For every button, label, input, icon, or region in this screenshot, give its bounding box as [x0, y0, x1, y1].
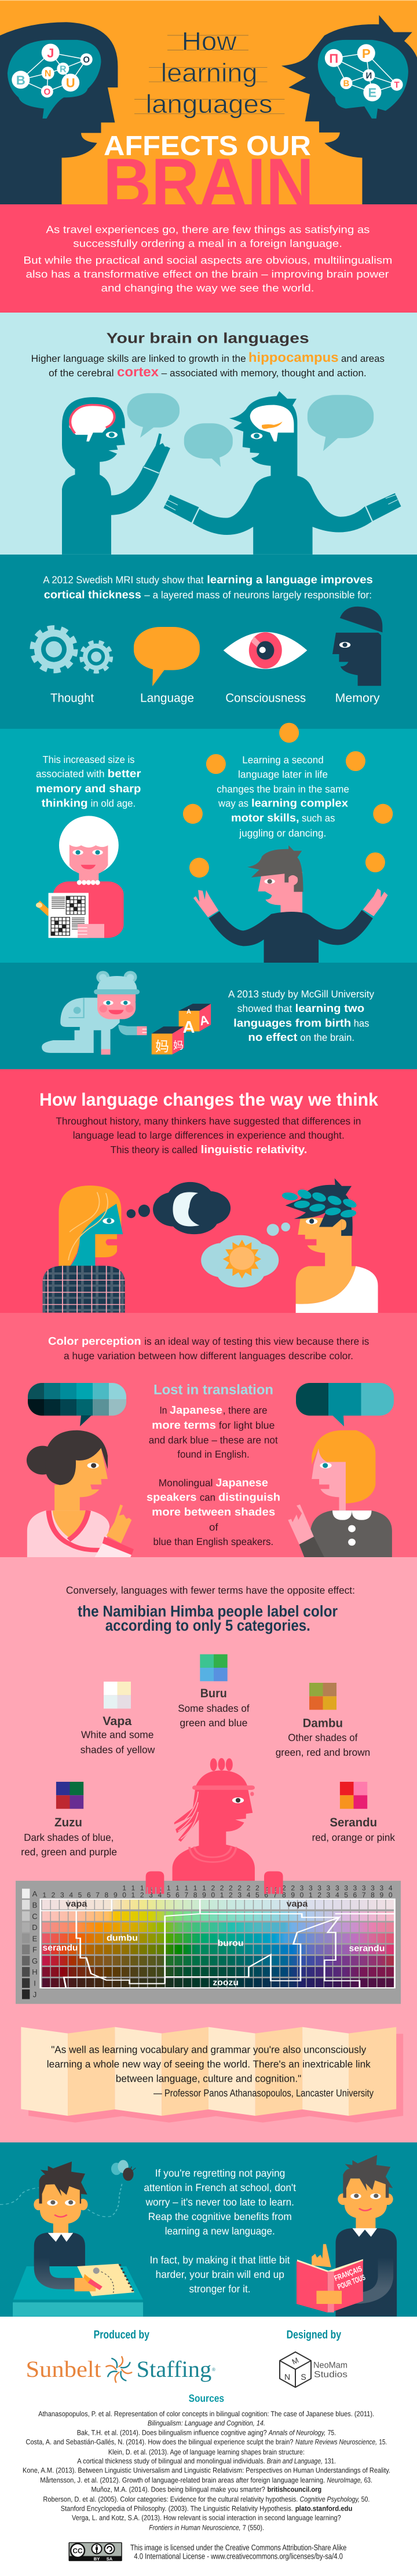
illustration: alphabet blocks: 妈	[155, 1039, 169, 1055]
text block: japanese terms: Japanese	[170, 1404, 222, 1417]
text block: japanese terms: Monolingual	[159, 1477, 213, 1489]
row letters	[32, 1889, 38, 1999]
panel: your brain on languages	[0, 313, 417, 555]
category labels: zoozu	[213, 1977, 239, 1987]
row letters: B	[32, 1901, 37, 1909]
text block: intro paragraph: But while the practical and social aspects are obvious, multilingualism	[23, 254, 392, 266]
illustration: alphabet blocks: A	[198, 1012, 210, 1029]
text block: color perception: is an ideal way of testing this view because there is	[144, 1335, 370, 1347]
text block: McGill study: no effect	[248, 1032, 298, 1044]
illustration: left head silhouette with latin letter network: U	[66, 76, 75, 90]
illustration: right head silhouette with cyrillic letter network: Т	[394, 80, 400, 90]
text block: quote: "As well as learning vocabulary and grammar you're also unconsciously	[51, 2044, 366, 2056]
text block: hippocampus and cortex: and areas	[341, 353, 385, 364]
row letters: D	[32, 1923, 38, 1932]
text block: encouragement: learning a new language.	[165, 2225, 275, 2237]
text block: references: Frontiers in Human Neuroscience,	[149, 2524, 241, 2532]
logo: neomam studios: M	[291, 2355, 300, 2366]
text block: japanese terms: distinguish	[218, 1491, 280, 1504]
text block: references: Verga, L. and Kotz, S.A. (2013). How relevant is social interaction in second language learning?	[72, 2514, 341, 2522]
text block: japanese terms: , there are	[223, 1404, 268, 1416]
illustration: woman thinking of the moon	[42, 1182, 231, 1313]
text block: linguistic relativity: language lead to large differences in experience and thought.	[73, 1129, 345, 1141]
text block: better memory: This increased size is	[43, 754, 135, 765]
logo: neomam studios: NeoMam	[313, 2361, 348, 2370]
illustration: boy with french book: POUR TOUS	[336, 2273, 367, 2291]
text block: motor skills: Learning a second	[242, 754, 324, 766]
category: vapa: shades of yellow	[81, 1744, 155, 1755]
category: dambu: Dambu	[303, 1717, 343, 1730]
row letters: E	[32, 1935, 38, 1943]
text block: references: Muñoz, M.A. (2014). Does being bilingual make you smarter?	[92, 2486, 265, 2494]
text block: encouragement: If you're regretting not paying	[155, 2167, 285, 2179]
illustration: left head silhouette with latin letter network: O	[43, 87, 50, 97]
text block: references: 131.	[324, 2457, 336, 2465]
icon: creative commons badge: SA	[107, 2556, 113, 2562]
thought bubble: sun	[201, 1223, 290, 1287]
text block: references: Bilingualism: Language and Cognition, 14.	[148, 2419, 265, 2427]
title: affects our: AFFECTS OUR	[104, 131, 311, 162]
heading: produced by: Produced by	[94, 2328, 150, 2341]
panel: memory and motor skills	[0, 723, 417, 963]
text block: references: 7 (550).	[243, 2524, 264, 2532]
text block: McGill study: on the brain.	[300, 1032, 354, 1043]
row letters: C	[32, 1912, 38, 1921]
thought bubble: moon	[127, 1182, 231, 1234]
panel: title header	[0, 0, 417, 222]
column numbers	[42, 1884, 393, 1899]
illustration: juggler with balls	[183, 723, 393, 963]
text block: references: Nature Reviews Neuroscience,	[295, 2438, 377, 2446]
callout: professor quote banner	[21, 2027, 403, 2123]
category: serandu: Serandu	[330, 1816, 377, 1829]
text block: references: plato.stanford.edu	[295, 2505, 352, 2513]
category: zuzu: Dark shades of blue,	[24, 1832, 114, 1843]
chart: japanese blues speech bubble	[28, 1383, 126, 1426]
heading: your brain on languages: Your brain on languages	[107, 330, 309, 346]
category labels: vapa	[65, 1899, 87, 1909]
text block: linguistic relativity: Throughout history, many thinkers have suggested that differences in	[56, 1115, 361, 1126]
illustration: japanese woman	[27, 1430, 134, 1558]
illustration: right head silhouette with cyrillic letter network: Е	[368, 86, 376, 100]
illustration: left head silhouette with latin letter network: B	[16, 73, 25, 87]
text block: references: Brain and Language,	[267, 2457, 323, 2465]
illustration: left head silhouette with latin letter network: R	[60, 65, 67, 74]
category labels: serandu	[349, 1944, 385, 1954]
illustration: right head silhouette with cyrillic letter network: В	[343, 79, 349, 89]
text block: icon labels: Consciousness	[225, 692, 306, 705]
text block: encouragement: attention in French at school, don't	[144, 2182, 296, 2193]
row letters: H	[32, 1968, 38, 1976]
text block: MRI study: learning a language improves	[207, 574, 373, 586]
text block: references: britishcouncil.org	[268, 2486, 321, 2494]
text block: better memory: memory and sharp	[36, 783, 141, 795]
colour rows	[41, 1900, 394, 1988]
text block: McGill study: showed that	[237, 1003, 292, 1014]
text block: references: Mårtensson, J. et al. (2012). Growth of language-related brain areas after foreign language learning.	[40, 2476, 325, 2485]
illustration: alphabet blocks: A	[183, 1018, 195, 1037]
text block: motor skills: changes the brain in the same	[217, 783, 349, 795]
text block: icon labels	[50, 692, 380, 705]
text block: japanese terms: found in English.	[177, 1448, 250, 1460]
himba hands over the chart	[146, 1872, 283, 1894]
category: dambu: Other shades of	[288, 1731, 357, 1743]
category: buru: green and blue	[180, 1717, 247, 1729]
text block: McGill study: learning two	[295, 1003, 364, 1015]
text block: McGill study: languages from birth	[233, 1017, 351, 1029]
text block: intro paragraph: also has a transformative effect on the brain – improving brain power	[25, 269, 389, 280]
text block: references	[23, 2410, 390, 2532]
text block: better memory: thinking	[42, 798, 88, 810]
category: serandu: red, orange or pink	[312, 1832, 395, 1843]
text block: japanese terms: In	[160, 1404, 167, 1416]
text block: motor skills: juggling or dancing.	[239, 827, 326, 839]
illustration: boy with french book	[297, 2155, 397, 2317]
text block: references: NeuroImage,	[327, 2476, 362, 2485]
text block: intro paragraph: and changing the way we see the world.	[101, 282, 314, 294]
text block: japanese terms: of	[209, 1521, 218, 1533]
illustration: right head silhouette with cyrillic letter network: И	[366, 71, 372, 81]
text block: references: Costa, A. and Sebastián-Gallés, N. (2014). How does the bilingual experience sculpt the brain?	[25, 2438, 294, 2446]
text block: japanese terms: speakers	[147, 1491, 196, 1504]
text block: references: Athanasopopulos, P. et al. Representation of color concepts in bilingual cognition: The case of Japanese blues. (2011).	[38, 2410, 374, 2418]
category: vapa: White and some	[81, 1729, 153, 1741]
person: right speaker with hippocampus highlighted	[163, 391, 401, 555]
text block: motor skills: motor skills,	[231, 812, 299, 824]
text block: japanese terms: for light blue	[219, 1419, 275, 1431]
heading: namibian himba: according to only 5 categories.	[105, 1617, 310, 1634]
logo: neomam studios: Studios	[314, 2370, 348, 2380]
icon: open head for memory	[332, 607, 382, 686]
icon: creative commons badge	[68, 2542, 122, 2562]
category: serandu	[312, 1782, 395, 1843]
chart: english blues speech bubble	[296, 1383, 394, 1426]
chart: munsell colour grid with himba categories	[16, 1872, 401, 2004]
juggling balls	[183, 723, 393, 878]
text block: linguistic relativity	[56, 1115, 361, 1156]
panel: credits and sources	[0, 2317, 417, 2576]
grey scale swatches	[22, 1889, 30, 1999]
text block: japanese terms: more terms	[152, 1419, 216, 1432]
text block: hippocampus and cortex: cortex	[117, 364, 159, 379]
text block: encouragement: Reap the cognitive benefits from	[148, 2211, 292, 2222]
person: left speaker with cortex highlighted	[62, 397, 170, 555]
heading: namibian himba: the Namibian Himba people label color	[78, 1602, 338, 1620]
text block: MRI study	[43, 574, 373, 601]
text block: motor skills: such as	[302, 812, 335, 824]
text block: references: Cognitive Psychology,	[300, 2496, 360, 2504]
icon: creative commons badge: BY	[94, 2556, 100, 2562]
logo: sunbelt staffing: Sunbelt	[25, 2356, 101, 2382]
heading: lost in translation: Lost in translation	[153, 1382, 273, 1397]
text block: motor skills: language later in life	[238, 769, 328, 780]
category labels: serandu	[43, 1943, 78, 1953]
text block: color perception: Color perception	[48, 1335, 141, 1348]
illustration: left head silhouette with latin letter network	[0, 22, 118, 204]
text block: intro paragraph	[23, 224, 392, 294]
illustration: alphabet blocks: A	[186, 1008, 191, 1015]
category labels: burou	[218, 1938, 244, 1948]
text block: conversely: Conversely, languages with fewer terms have the opposite effect:	[66, 1584, 355, 1596]
text block: better memory: in old age.	[91, 798, 136, 809]
text block: linguistic relativity: linguistic relativity.	[201, 1144, 307, 1156]
illustration: boy with french book: FRANÇAIS	[333, 2264, 363, 2283]
text block: references: 15.	[379, 2438, 387, 2446]
text block: references: Bak, T.H. et al. (2014). Does bilingualism influence cognitive aging?	[77, 2429, 267, 2437]
category: buru: Some shades of	[178, 1702, 250, 1714]
text block: intro paragraph: successfully ordering a meal in a foreign language.	[73, 238, 342, 249]
column numbers: 1111111111222222222233333333334	[122, 1884, 393, 1892]
illustration: right head silhouette with cyrillic letter network: П	[329, 51, 338, 65]
text block: motor skills	[217, 754, 349, 839]
logo: neomam studios: S	[301, 2372, 306, 2381]
text block: motor skills: learning complex	[251, 797, 348, 809]
text block: hippocampus and cortex: hippocampus	[248, 350, 339, 365]
text block: icon labels: Memory	[335, 692, 380, 705]
text block: hippocampus and cortex: – associated with memory, thought and action.	[162, 368, 367, 379]
text block: McGill study: has	[354, 1017, 370, 1029]
text block: MRI study: – a layered mass of neurons largely responsible for:	[144, 589, 372, 601]
logo: neomam studios	[280, 2352, 348, 2387]
illustration: blonde woman	[288, 1430, 392, 1558]
panel: never too late	[0, 2142, 417, 2317]
illustration: crawling baby in bear hat	[42, 971, 147, 1055]
category labels: dumbu	[107, 1933, 138, 1943]
logo: sunbelt staffing: Staffing	[137, 2356, 211, 2382]
category: vapa	[81, 1682, 155, 1755]
panel: himba colour categories	[0, 1557, 417, 2142]
text block: references: Klein, D. et al. (2013). Age of language learning shapes brain structure:	[108, 2448, 305, 2456]
text block: hippocampus and cortex: Higher language skills are linked to growth in the	[31, 353, 246, 364]
text block: intro paragraph: As travel experiences go, there are few things as satisfying as	[46, 224, 370, 236]
illustration: right head silhouette with cyrillic letter network: Р	[362, 46, 371, 61]
category: zuzu: Zuzu	[54, 1816, 82, 1829]
text block: quote: between language, culture and cognition."	[116, 2073, 301, 2085]
text block: McGill study	[228, 988, 374, 1044]
text block: references: Roberson, D. et al. (2005). Color categories: Evidence for the cultural relativity hypothesis.	[43, 2496, 298, 2504]
icon: bee	[111, 2160, 136, 2181]
text block: McGill study: A 2013 study by McGill University	[228, 988, 374, 1000]
text block: references: A cortical thickness study of bilingual and monolingual individuals.	[77, 2457, 265, 2465]
panel: how language changes the way we think	[0, 1069, 417, 1313]
category: vapa: Vapa	[103, 1715, 132, 1728]
panel: introduction	[0, 204, 417, 313]
text block: japanese terms	[147, 1404, 280, 1547]
text block: license: This image is licensed under the Creative Commons Attribution-Share Alike	[130, 2543, 346, 2552]
text block: color perception: a huge variation between how different languages describe color.	[64, 1350, 353, 1362]
illustration: himba figure	[173, 1758, 255, 1881]
text block: icon labels: Thought	[50, 692, 94, 705]
heading: how language changes: How language changes the way we think	[39, 1089, 379, 1110]
logo: neomam studios: N	[284, 2372, 290, 2381]
text block: references: 50.	[361, 2496, 370, 2504]
illustration: grandmother with crossword	[36, 816, 124, 938]
category: buru	[178, 1654, 250, 1729]
category: zuzu: red, green and purple	[21, 1846, 117, 1858]
illustration: alphabet blocks	[152, 1004, 211, 1055]
text block: linguistic relativity: This theory is called	[111, 1144, 197, 1155]
row letters: J	[33, 1990, 36, 1999]
row letters: G	[32, 1957, 38, 1965]
row letters: I	[34, 1979, 36, 1988]
heading: designed by: Designed by	[287, 2328, 342, 2341]
illustration: right head silhouette with cyrillic letter network	[281, 15, 417, 204]
category: zuzu	[21, 1782, 117, 1858]
row letters: F	[32, 1945, 37, 1954]
illustration: laurel man thinking of the sun	[201, 1178, 378, 1313]
text block: motor skills: way as	[218, 797, 248, 809]
illustration: two people talking with speech bubbles	[62, 391, 401, 555]
panel: color perception	[0, 1313, 417, 1558]
text block: license: 4.0 International License - www.creativecommons.org/licenses/by-sa/4.0	[134, 2552, 343, 2561]
text block: encouragement: In fact, by making it that little bit	[149, 2254, 290, 2266]
logo: sunbelt staffing	[25, 2356, 215, 2382]
title: how learning languages	[134, 27, 284, 119]
category: dambu: green, red and brown	[276, 1746, 370, 1758]
illustration: left head silhouette with latin letter network: O	[83, 55, 90, 65]
illustration: alphabet blocks: 妈	[173, 1040, 184, 1051]
icon: creative commons badge: CC	[72, 2547, 83, 2555]
text block: color perception	[48, 1335, 370, 1362]
illustration: left head silhouette with latin letter network: N	[45, 69, 51, 79]
category boundary lines	[41, 1899, 394, 1988]
title: brain: BRAIN	[103, 144, 314, 222]
category: dambu	[276, 1683, 370, 1758]
text block: better memory: associated with	[36, 768, 104, 780]
text block: MRI study: A 2012 Swedish MRI study show that	[43, 574, 204, 586]
text block: japanese terms: can	[200, 1491, 215, 1503]
text block: encouragement: stronger for it.	[189, 2283, 250, 2295]
column numbers: 1234567890123456789012345678901234567890	[42, 1891, 393, 1899]
text block: japanese terms: blue than English speakers.	[153, 1536, 273, 1547]
speech bubbles	[127, 393, 374, 467]
text block: japanese terms: more between shades	[152, 1506, 275, 1518]
text block: japanese terms: and dark blue – these are not	[149, 1434, 278, 1445]
category labels	[43, 1899, 385, 1987]
icon: speech bubble for language	[134, 627, 200, 687]
text block: encouragement	[144, 2167, 296, 2295]
icon: gears for thought	[32, 628, 111, 672]
text block: better memory	[36, 754, 141, 810]
title: how learning languages: How	[182, 27, 237, 56]
text block: icon labels: Language	[140, 692, 194, 705]
text block: references: Stanford Encyclopedia of Philosophy. (2003). The Linguistic Relativity Hypothesis.	[61, 2505, 293, 2513]
panel: cortical thickness	[0, 555, 417, 729]
text block: hippocampus and cortex: of the cerebral	[49, 368, 114, 379]
illustration: boy at desk with notebook and bee	[0, 2160, 143, 2317]
row letters: A	[32, 1889, 38, 1898]
text block: quote: — Professor Panos Athanasopoulos, Lancaster University	[153, 2087, 374, 2099]
text block: quote	[47, 2044, 374, 2099]
text block: better memory: better	[108, 768, 141, 780]
illustration: left head silhouette with latin letter network: J	[47, 46, 54, 60]
logo: sunbelt staffing: ®	[212, 2367, 215, 2372]
icon: eye for consciousness	[224, 632, 307, 669]
title: how learning languages: languages	[146, 89, 273, 119]
heading: sources: Sources	[189, 2392, 224, 2404]
text block: MRI study: cortical thickness	[44, 589, 141, 601]
text block: japanese terms: Japanese	[215, 1477, 268, 1489]
text block: encouragement: worry – it's never too late to learn.	[145, 2196, 294, 2208]
text block: references: 63.	[364, 2476, 372, 2485]
text block: references: 75.	[328, 2429, 336, 2437]
category labels: vapa	[287, 1899, 308, 1909]
text block: quote: learning a whole new way of seeing the world. There's an inextricable link	[47, 2058, 371, 2070]
title: how learning languages: learning	[161, 58, 257, 87]
panel: learning two languages from birth	[0, 963, 417, 1069]
text block: hippocampus and cortex	[31, 350, 385, 379]
heading: namibian himba	[78, 1602, 338, 1634]
text block: license	[130, 2543, 346, 2561]
category: buru: Buru	[200, 1687, 227, 1700]
text block: references: Annals of Neurology,	[268, 2429, 325, 2437]
text block: encouragement: harder, your brain will end up	[156, 2269, 284, 2280]
